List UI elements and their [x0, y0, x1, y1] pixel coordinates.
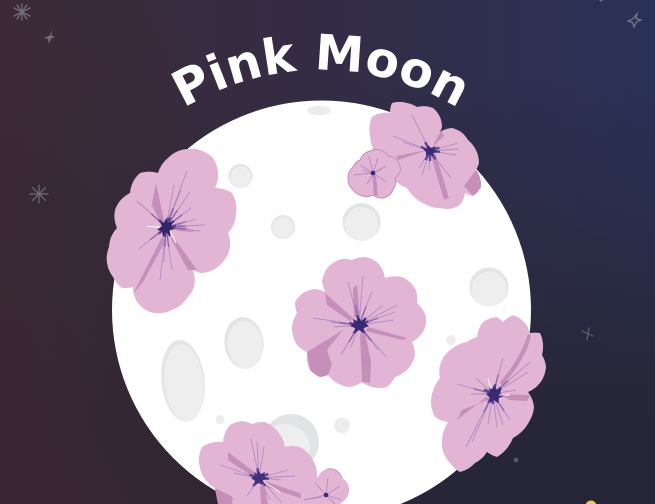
crater: small centre	[271, 215, 295, 239]
crater: right	[470, 268, 508, 306]
petal shadows	[133, 183, 197, 294]
crater: upper centre	[342, 203, 380, 241]
petal shadows	[457, 334, 531, 420]
title: Pink Moon	[171, 34, 464, 106]
petals	[199, 421, 317, 504]
icon: thin star right	[582, 328, 593, 340]
rays	[354, 156, 386, 184]
highlights	[147, 226, 176, 243]
petal shadows	[372, 175, 378, 196]
highlights	[488, 379, 510, 395]
rays	[304, 478, 342, 504]
petal shadows	[215, 452, 305, 504]
crater: oval centre left	[222, 315, 266, 371]
rays	[137, 171, 205, 280]
flower centre	[324, 493, 328, 497]
petals	[107, 149, 236, 313]
flower: right	[431, 315, 546, 472]
flower centre	[423, 145, 438, 157]
petals	[369, 102, 481, 209]
flower: left	[107, 149, 236, 313]
petals	[292, 257, 426, 388]
icon: yellow dot bottom edge	[586, 500, 596, 504]
crater: small lower	[334, 418, 350, 434]
flower centre	[486, 385, 504, 403]
petal shadows	[307, 285, 407, 383]
crater: long oval left	[157, 338, 209, 424]
flower: top right	[369, 102, 481, 209]
flower: small top right	[348, 150, 400, 198]
flower centre	[251, 470, 268, 485]
icon: asterisk star top left	[14, 4, 30, 20]
crater: upper left	[228, 164, 252, 188]
icon: asterisk star left	[30, 185, 48, 203]
icon: hollow star top right	[628, 14, 641, 27]
flower: small bottom	[300, 469, 349, 504]
petal shadows	[304, 469, 342, 500]
crater: top	[307, 106, 331, 115]
petals	[431, 315, 546, 472]
moon	[112, 100, 531, 504]
crater: large lower	[260, 414, 319, 474]
icon: small dot lower right	[514, 458, 518, 462]
icon: faint dot top right	[600, 0, 602, 2]
flower centre	[371, 171, 375, 175]
rays	[220, 438, 295, 503]
flower: centre	[292, 257, 426, 388]
crater: tiny lower left	[216, 415, 224, 424]
petals	[348, 150, 400, 198]
flower: bottom	[199, 421, 317, 504]
flower centre	[157, 218, 175, 237]
rays	[457, 358, 530, 447]
rays	[393, 115, 459, 178]
icon: small star top left	[44, 30, 55, 44]
petal shadows	[396, 131, 481, 200]
petals	[300, 469, 349, 504]
flower centre	[350, 316, 369, 333]
crater: small right	[446, 335, 456, 345]
highlights	[264, 482, 280, 492]
rays	[313, 276, 397, 357]
